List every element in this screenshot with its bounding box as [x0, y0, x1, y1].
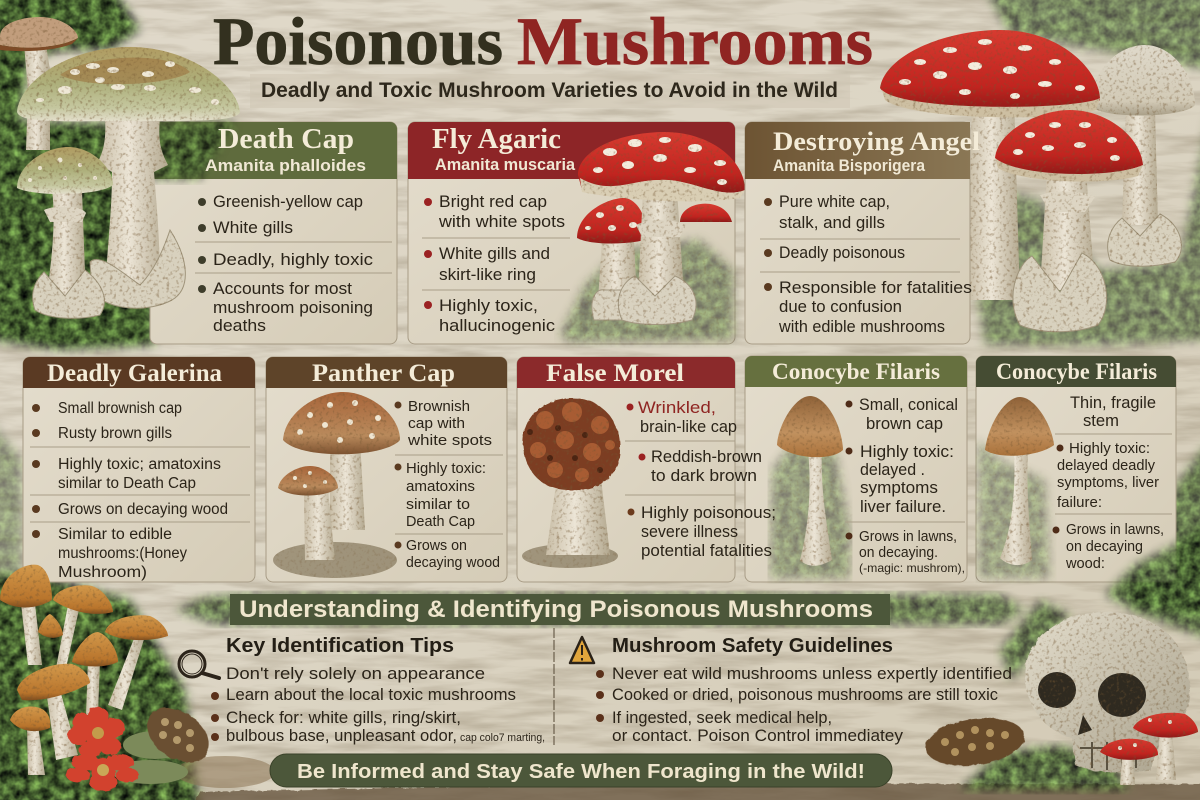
- facts: Deadly Galerina: Rusty brown gills: [58, 425, 172, 442]
- illustration: orange mushrooms bottom left: [0, 565, 168, 775]
- facts: Deadly Galerina: similar to Death Cap: [58, 475, 196, 492]
- facts: Conocybe Filaris: brown cap: [866, 415, 943, 433]
- heading: Fly Agaric: Amanita muscaria: [435, 155, 576, 174]
- guidelines list: [596, 665, 1012, 745]
- facts: Fly Agaric: [422, 193, 570, 335]
- illustration: small red mushrooms bottom right: [1100, 713, 1198, 785]
- illustration: pine cone left: [137, 697, 219, 773]
- facts: Destroying Angel: Responsible for fatalities: [779, 279, 972, 297]
- heading: Destroying Angel: [773, 127, 980, 175]
- facts: Panther Cap: decaying wood: [406, 555, 500, 571]
- facts: Panther Cap: Brownish: [408, 399, 470, 415]
- panel: Conocybe Filaris (first): [745, 356, 967, 582]
- facts: Death Cap: [195, 193, 392, 335]
- facts: False Morel: to dark brown: [651, 467, 757, 485]
- illustration: skull: [1025, 612, 1190, 772]
- facts: Conocybe Filaris: Thin, fragile: [1070, 394, 1156, 412]
- facts: Fly Agaric: hallucinogenic: [439, 317, 555, 335]
- facts: Conocybe Filaris: wood:: [1065, 556, 1105, 572]
- facts: Death Cap: White gills: [213, 219, 293, 237]
- tips list: bulbous base, unpleasant odor,: [226, 727, 457, 745]
- heading: Destroying Angel: Amanita Bisporigera: [773, 156, 925, 175]
- facts: False Morel: Highly poisonous;: [641, 504, 776, 522]
- footer banner: Be Informed and Stay Safe When Foraging in the Wild!: [297, 761, 865, 783]
- facts: False Morel: brain-like cap: [640, 418, 737, 436]
- tips list: Don't rely solely on appearance: [226, 665, 485, 683]
- facts: Conocybe Filaris: Highly toxic:: [860, 443, 954, 461]
- heading: Fly Agaric: [432, 124, 576, 174]
- facts: Panther Cap: Death Cap: [406, 514, 475, 530]
- facts: Conocybe Filaris: Grows in lawns,: [859, 529, 957, 545]
- illustration: Death Cap mushrooms: [17, 47, 240, 318]
- facts: Conocybe Filaris: Grows in lawns,: [1066, 522, 1164, 538]
- facts: False Morel: potential fatalities: [641, 542, 772, 560]
- facts: Conocybe Filaris: on decaying: [1066, 539, 1143, 555]
- facts: Destroying Angel: with edible mushrooms: [778, 318, 945, 336]
- heading: Death Cap: Death Cap: [218, 124, 354, 155]
- facts: False Morel: severe illness: [641, 523, 738, 541]
- facts: Conocybe Filaris: [1052, 394, 1172, 572]
- facts: Deadly Galerina: Highly toxic; amatoxins: [58, 456, 221, 473]
- heading: Death Cap: [205, 124, 366, 175]
- facts: Panther Cap: similar to: [406, 497, 470, 513]
- facts: False Morel: [625, 399, 776, 560]
- subtitle ribbon: [250, 74, 850, 108]
- illustration: red flowers and leaves: [66, 707, 188, 791]
- panel: False Morel: [517, 357, 776, 582]
- icon: fern over panel corner: [1105, 520, 1200, 620]
- facts: Conocybe Filaris: delayed .: [860, 461, 925, 479]
- tips list: Learn about the local toxic mushrooms: [226, 686, 516, 704]
- facts: False Morel: Wrinkled,: [638, 399, 716, 417]
- facts: Conocybe Filaris: failure:: [1057, 495, 1102, 511]
- illustration: Destroying Angel mushrooms: [880, 30, 1195, 332]
- facts: Conocybe Filaris: symptoms: [860, 479, 938, 497]
- guidelines list: or contact. Poison Control immediatey: [612, 727, 904, 745]
- facts: Conocybe Filaris: on decaying.: [859, 545, 938, 561]
- facts: Conocybe Filaris: stem: [1083, 412, 1119, 430]
- illustration: conocybe mushroom: [978, 397, 1054, 578]
- heading: Conocybe Filaris: Conocybe Filaris: [772, 359, 940, 384]
- tips list: cap colo7 marting,: [460, 732, 545, 744]
- facts: Conocybe Filaris: [845, 396, 965, 575]
- facts: Panther Cap: cap with: [408, 416, 465, 432]
- heading: Conocybe Filaris: Conocybe Filaris: [996, 359, 1157, 384]
- tips list: [211, 665, 545, 745]
- icon: warning triangle: [570, 637, 594, 663]
- facts: Fly Agaric: Bright red cap: [439, 193, 547, 211]
- illustration: pine cone right: [922, 712, 1028, 772]
- facts: Fly Agaric: White gills and: [439, 245, 550, 263]
- facts: Fly Agaric: Highly toxic,: [439, 297, 538, 315]
- illustration: tan mushroom top left: [0, 17, 78, 150]
- tips list: Check for: white gills, ring/skirt,: [226, 709, 461, 727]
- illustration: fly agaric mushrooms: [560, 132, 745, 342]
- facts: Conocybe Filaris: Highly toxic:: [1069, 441, 1150, 457]
- heading: False Morel: False Morel: [546, 360, 684, 387]
- facts: Panther Cap: Highly toxic:: [406, 461, 486, 477]
- facts: Death Cap: Accounts for most: [213, 280, 352, 298]
- heading: Fly Agaric: Fly Agaric: [432, 124, 561, 155]
- panel: Fly Agaric: [408, 122, 745, 344]
- guidelines list: Never eat wild mushrooms unless expertly identified: [612, 665, 1012, 683]
- heading: Key Identification Tips: Key Identification Tips: [226, 635, 454, 657]
- facts: Destroying Angel: Pure white cap,: [779, 193, 890, 211]
- footer banner: [270, 754, 892, 787]
- facts: Fly Agaric: skirt-like ring: [439, 266, 536, 284]
- section banner: [175, 594, 1025, 625]
- panel: Death Cap: [150, 122, 397, 344]
- heading: Mushroom Safety Guidelines: Mushroom Safety Guidelines: [612, 635, 893, 657]
- facts: Destroying Angel: stalk, and gills: [779, 214, 885, 232]
- heading: Destroying Angel: Destroying Angel: [773, 127, 980, 156]
- title: [213, 3, 873, 79]
- panel: Conocybe Filaris (second): [976, 356, 1200, 620]
- facts: Fly Agaric: with white spots: [438, 213, 565, 231]
- heading: Panther Cap: Panther Cap: [312, 360, 455, 387]
- facts: Conocybe Filaris: symptoms, liver: [1057, 475, 1159, 491]
- panel: Mushroom Safety Guidelines: [570, 635, 1012, 745]
- panel: Deadly Galerina: [23, 357, 255, 582]
- facts: Death Cap: deaths: [213, 317, 266, 335]
- facts: Death Cap: Deadly, highly toxic: [213, 251, 373, 269]
- guidelines list: If ingested, seek medical help,: [612, 709, 832, 727]
- icon: magnifying glass: [179, 651, 219, 678]
- title: Poisonous: [213, 3, 503, 79]
- illustration: panther cap mushrooms: [273, 392, 400, 578]
- facts: Deadly Galerina: Grows on decaying wood: [58, 501, 228, 518]
- title: Mushrooms: [517, 3, 873, 79]
- panel: Destroying Angel: [745, 122, 980, 344]
- facts: Destroying Angel: Deadly poisonous: [779, 244, 905, 262]
- facts: Conocybe Filaris: delayed deadly: [1057, 458, 1156, 474]
- facts: Conocybe Filaris: liver failure.: [860, 498, 946, 516]
- facts: Destroying Angel: [760, 193, 972, 336]
- facts: Deadly Galerina: [30, 400, 250, 581]
- facts: False Morel: Reddish-brown: [651, 448, 762, 466]
- facts: Panther Cap: [394, 399, 503, 571]
- section banner: Understanding & Identifying Poisonous Mushrooms: [239, 596, 873, 623]
- facts: Deadly Galerina: Mushroom): [58, 564, 147, 581]
- guidelines list: Cooked or dried, poisonous mushrooms are still toxic: [612, 686, 998, 704]
- heading: Deadly Galerina: Deadly Galerina: [47, 360, 222, 387]
- facts: Destroying Angel: due to confusion: [779, 298, 902, 316]
- panel: Panther Cap: [266, 357, 507, 582]
- facts: Deadly Galerina: Small brownish cap: [58, 400, 182, 417]
- panel: Key Identification Tips: [179, 635, 545, 745]
- illustration: conocybe mushroom: [770, 396, 850, 578]
- illustration: false morel mushroom: [522, 398, 620, 568]
- facts: Death Cap: mushroom poisoning: [213, 299, 373, 317]
- heading: Death Cap: Amanita phalloides: [205, 156, 366, 175]
- facts: Conocybe Filaris: Small, conical: [859, 396, 958, 414]
- facts: Deadly Galerina: Similar to edible: [58, 526, 172, 543]
- facts: Panther Cap: amatoxins: [406, 479, 475, 495]
- facts: Panther Cap: white spots: [407, 433, 492, 449]
- facts: Conocybe Filaris: (-magic: mushrom),: [859, 561, 965, 575]
- facts: Panther Cap: Grows on: [406, 538, 467, 554]
- subtitle ribbon: Deadly and Toxic Mushroom Varieties to Avoid in the Wild: [261, 79, 838, 102]
- facts: Death Cap: Greenish-yellow cap: [213, 193, 363, 211]
- facts: Deadly Galerina: mushrooms:(Honey: [58, 545, 187, 562]
